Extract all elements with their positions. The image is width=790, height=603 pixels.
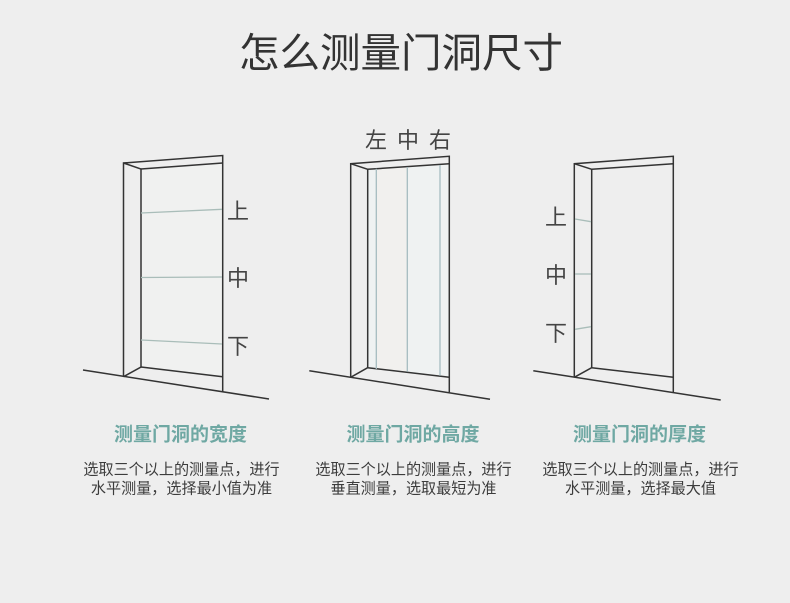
description: thickness (542, 462, 739, 498)
measuring lines: width (141, 209, 222, 344)
labels: top, middle, bottom: 中 (227, 266, 249, 291)
labels: top, middle, bottom (227, 199, 249, 359)
labels: top, middle, bottom: 下 (545, 321, 567, 346)
description: thickness: 选取三个以上的测量点，进行 (542, 462, 739, 478)
door diagram: height (309, 156, 490, 399)
labels: left, middle, right: 中 (397, 128, 419, 153)
description: height (315, 462, 512, 498)
heading: thickness: 测量门洞的厚度 (573, 422, 706, 446)
heading: height: 测量门洞的高度 (346, 422, 480, 446)
labels: top, middle, bottom: 中 (545, 263, 567, 288)
labels: left, middle, right: 右 (429, 128, 451, 153)
labels: top, middle, bottom: 上 (227, 199, 249, 224)
measuring lines: height (376, 165, 440, 376)
door diagram: width (83, 156, 269, 399)
labels: left, middle, right (365, 128, 451, 153)
panel: thickness measurement (533, 156, 739, 498)
labels: top, middle, bottom: 上 (545, 205, 567, 230)
panel: height measurement (309, 128, 512, 498)
description: height: 选取三个以上的测量点，进行 (315, 462, 512, 478)
panel: width measurement (83, 156, 280, 498)
labels: top, middle, bottom: 下 (227, 334, 249, 359)
description: width: 水平测量，选择最小值为准 (91, 480, 272, 498)
description: width (83, 462, 280, 498)
heading: width: 测量门洞的宽度 (114, 422, 247, 446)
labels: top, middle, bottom (545, 205, 567, 346)
door diagram: thickness (533, 156, 721, 400)
description: thickness: 水平测量，选择最大值 (565, 480, 716, 498)
description: height: 垂直测量，选取最短为准 (330, 480, 497, 498)
title: 怎么测量门洞尺寸 (239, 30, 563, 76)
measuring lines: thickness (575, 219, 591, 329)
description: width: 选取三个以上的测量点，进行 (83, 462, 280, 478)
labels: left, middle, right: 左 (365, 128, 387, 153)
